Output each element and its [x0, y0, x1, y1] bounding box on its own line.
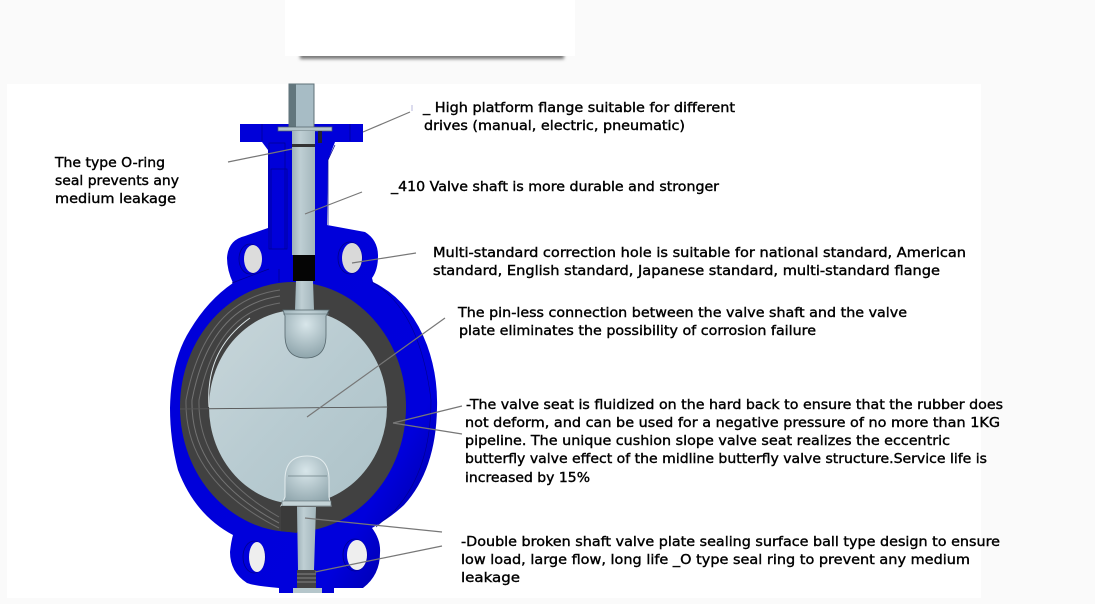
callout: pin-less connection [457, 306, 907, 339]
callout: O-ring seal: The type O-ring [54, 156, 165, 171]
valve cutaway illustration [170, 84, 437, 593]
valve body [170, 124, 437, 593]
upper disc hub [283, 310, 329, 358]
callout: valve seat: pipeline. The unique cushion slope valve seat realizes the eccentric [465, 434, 950, 449]
callout: double broken shaft [461, 535, 1000, 586]
callout: O-ring seal [54, 156, 179, 207]
callout: correction hole: standard, English standard, Japanese standard, multi-standard flange [433, 264, 940, 279]
upper shaft [278, 84, 332, 310]
lower shaft [281, 506, 322, 593]
callout: correction hole [433, 246, 966, 279]
callout: high platform flange: _ High platform flange suitable for different [422, 101, 735, 116]
callout: valve seat: butterfly valve effect of the midline butterfly valve structure.Service life is [465, 452, 987, 467]
lower disc hub [281, 456, 331, 506]
callout: valve seat [465, 398, 1003, 486]
callout: pin-less connection: plate eliminates the possibility of corrosion failure [459, 324, 816, 339]
callout: double broken shaft: low load, large flow, long life _O type seal ring to prevent any medium [461, 553, 970, 568]
seat liner [180, 282, 406, 532]
callout: valve seat: increased by 15% [465, 471, 590, 486]
leader lines [228, 105, 462, 572]
callout: double broken shaft: leakage [461, 571, 520, 586]
main white panel [7, 84, 981, 598]
top white box with shadow [285, 0, 575, 59]
callout: valve seat: not deform, and can be used for a negative pressure of no more than 1KG [465, 416, 1000, 431]
mounting holes [239, 242, 367, 573]
callout: high platform flange [422, 101, 735, 134]
callout: high platform flange: drives (manual, electric, pneumatic) [424, 119, 685, 134]
callout: pin-less connection: The pin-less connection between the valve shaft and the valve [457, 306, 907, 321]
valve disc [180, 310, 388, 504]
callout: O-ring seal: medium leakage [55, 192, 176, 207]
callout: O-ring seal: seal prevents any [55, 174, 179, 189]
callout: correction hole: Multi-standard correction hole is suitable for national standard, American [433, 246, 966, 261]
callout: double broken shaft: -Double broken shaft valve plate sealing surface ball type design to ensure [461, 535, 1000, 550]
callout: 410 valve shaft: _410 Valve shaft is more durable and stronger [390, 180, 720, 195]
callout: valve seat: -The valve seat is fluidized on the hard back to ensure that the rubber does [466, 398, 1003, 413]
